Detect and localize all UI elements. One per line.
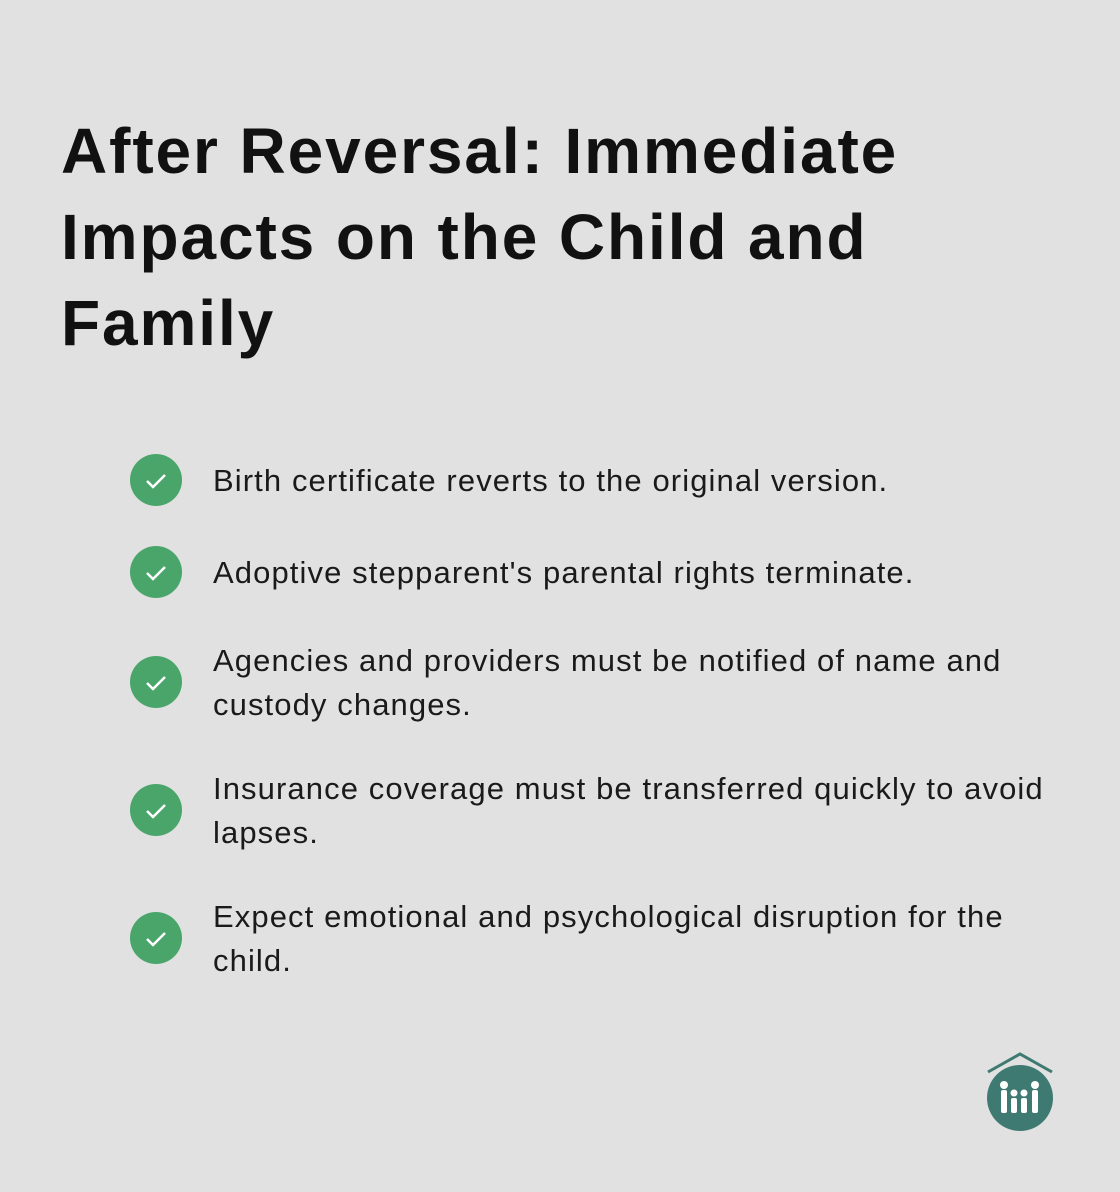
icon: check: [130, 656, 182, 708]
icon: check: [130, 784, 182, 836]
item 1: [130, 454, 888, 506]
icon: check: [130, 546, 182, 598]
icon: check: [130, 912, 182, 964]
logo: [987, 1052, 1053, 1131]
item 3: Agencies and providers must be notified of name and custody changes.: [213, 643, 1002, 722]
item 5: Expect emotional and psychological disruption for the child.: [213, 899, 1004, 978]
title: After Reversal: Immediate Impacts on the Child and Family: [61, 115, 898, 359]
item 4: Insurance coverage must be transferred quickly to avoid lapses.: [213, 771, 1044, 850]
item 1: Birth certificate reverts to the original version.: [213, 463, 888, 498]
item 2: [130, 546, 914, 598]
icon: check: [130, 454, 182, 506]
item 2: Adoptive stepparent's parental rights terminate.: [213, 555, 914, 590]
